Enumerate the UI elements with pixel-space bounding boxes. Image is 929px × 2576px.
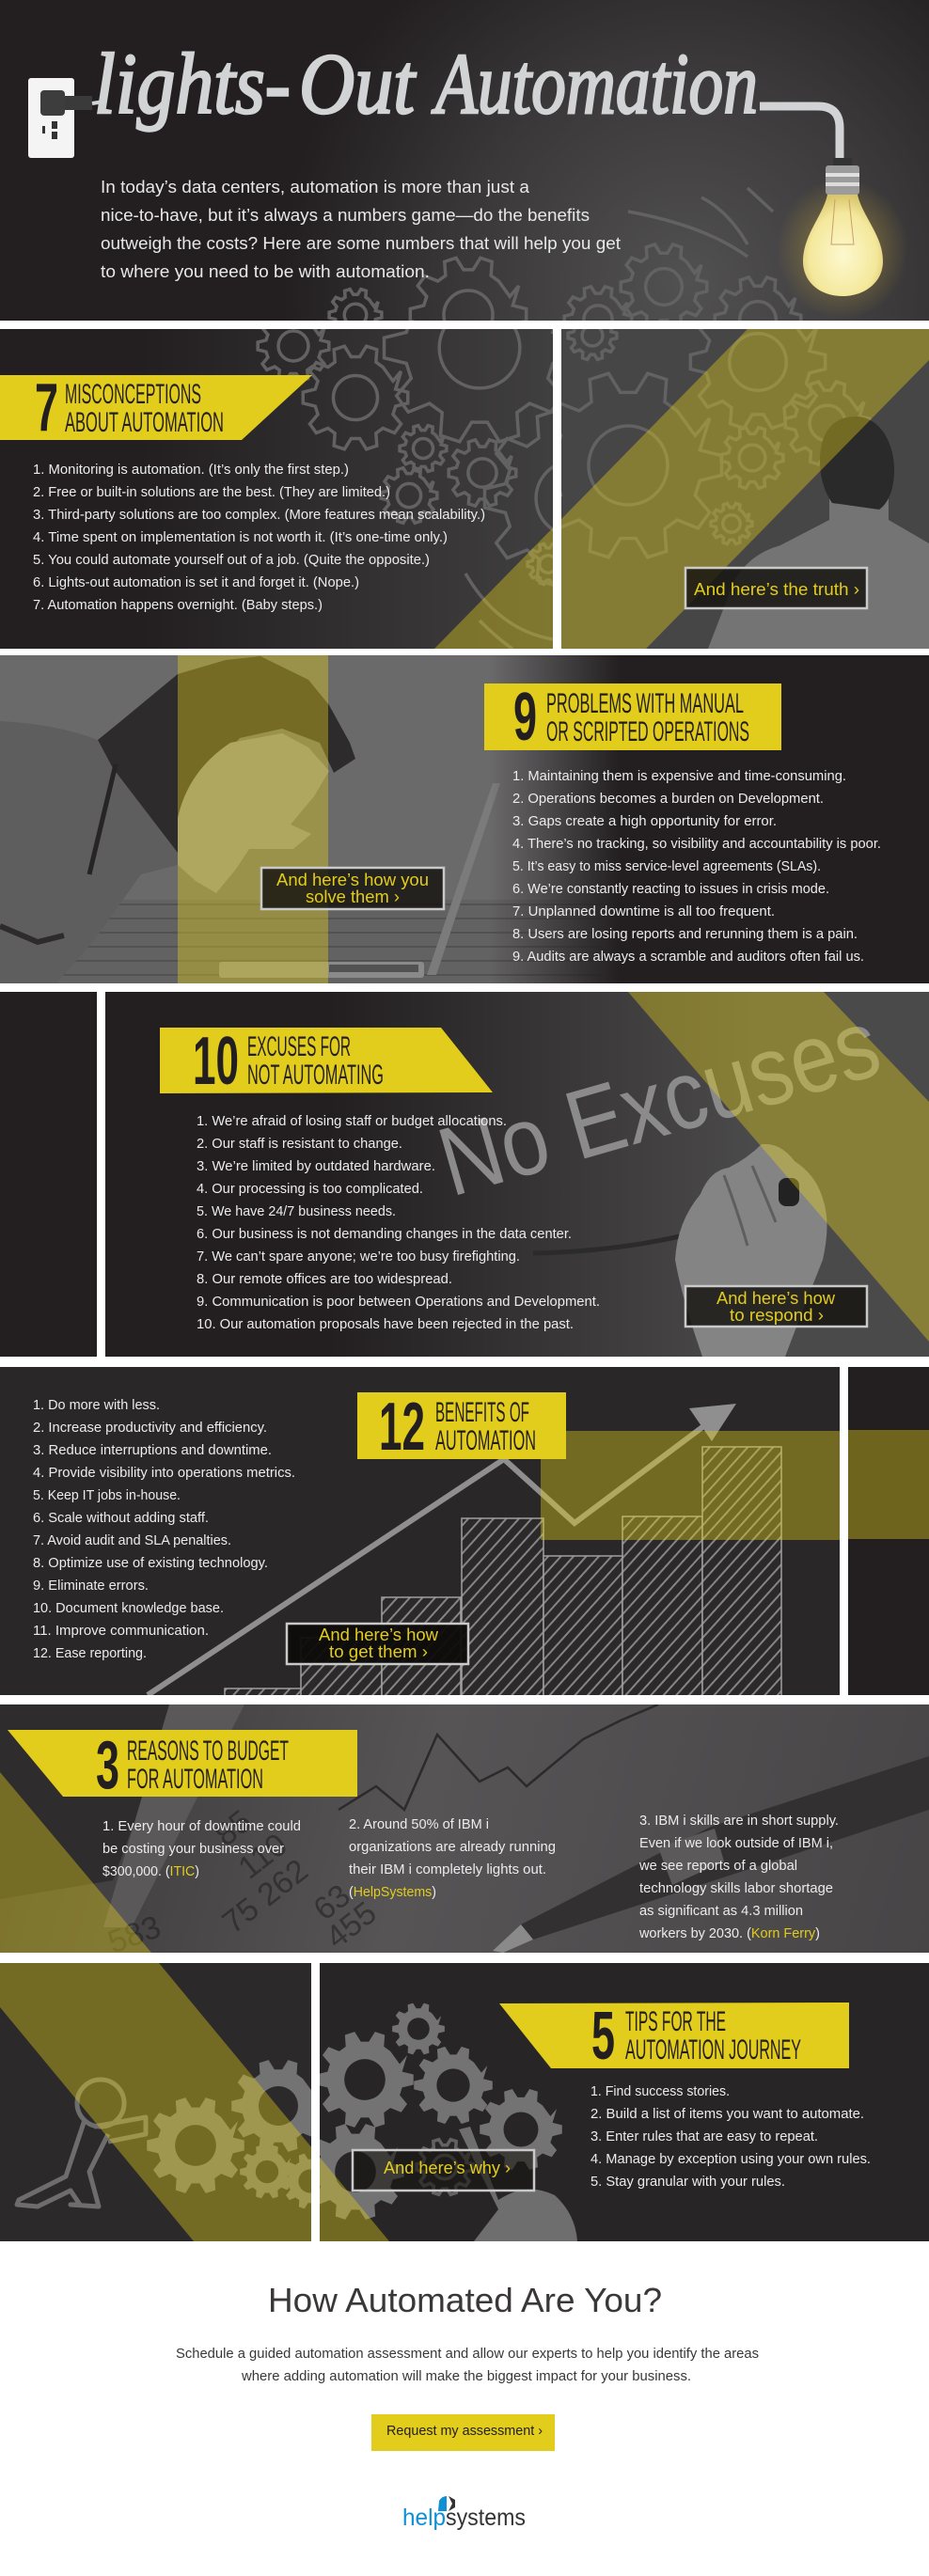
button: how to respond: to respond ›: [730, 1306, 824, 1325]
yellow band: [178, 655, 328, 983]
title: Out: [299, 36, 417, 132]
filled gears: [147, 2060, 339, 2208]
list: [33, 463, 485, 613]
heading banner: OR SCRIPTED OPERATIONS: [546, 716, 749, 747]
panel: 12 benefits side strip: [848, 1367, 929, 1695]
list: 1. Find success stories.: [590, 2084, 730, 2099]
list: 5. Keep IT jobs in-house.: [33, 1488, 181, 1503]
button: and here's the truth: [685, 568, 867, 608]
heading banner: PROBLEMS WITH MANUAL: [546, 688, 744, 719]
title: lights-: [94, 36, 291, 132]
list: 3. Gaps create a high opportunity for error.: [512, 814, 777, 829]
heading banner: BENEFITS OF: [435, 1397, 529, 1428]
heading: how automated are you: How Automated Are You?: [268, 2281, 662, 2319]
intro text: outweigh the costs? Here are some numbers that will help you get: [101, 234, 621, 253]
heading banner: [484, 683, 781, 750]
panel background: [561, 329, 929, 649]
desk photo background: [0, 1704, 929, 1953]
yellow band: [0, 1963, 389, 2241]
panel: 7 misconceptions: [0, 329, 553, 649]
logo: helpsystems: help: [402, 2505, 446, 2531]
panel: 3 reasons: [0, 1704, 929, 1961]
reason 1: $300,000. (ITIC): [102, 1864, 199, 1879]
reason 3: technology skills labor shortage: [639, 1881, 833, 1896]
list: 6. Our business is not demanding changes in the data center.: [197, 1227, 572, 1242]
heading banner: 12: [379, 1390, 425, 1465]
heading banner: 9: [513, 680, 537, 755]
list: 3. Reduce interruptions and downtime.: [33, 1443, 272, 1458]
list: 3. Enter rules that are easy to repeat.: [590, 2129, 818, 2144]
list: 12. Ease reporting.: [33, 1646, 147, 1661]
chalk gears: [256, 329, 553, 649]
list: 11. Improve communication.: [33, 1624, 209, 1639]
title: [97, 51, 756, 133]
heading banner: AUTOMATION: [435, 1425, 536, 1456]
button: how to respond: [685, 1286, 867, 1327]
list: 8. Our remote offices are too widespread.: [197, 1272, 452, 1287]
list: 9. Audits are always a scramble and auditors often fail us.: [512, 950, 864, 965]
yellow band: [0, 1963, 389, 2241]
heading banner: [499, 1999, 849, 2074]
list: 7. Automation happens overnight. (Baby steps.): [33, 598, 323, 613]
reason 1: 1. Every hour of downtime could: [102, 1819, 301, 1834]
chalk gears: [561, 329, 871, 559]
panel background: [320, 1963, 929, 2241]
list: 3. Third-party solutions are too complex. (More features mean scalability.): [33, 508, 485, 523]
reason 2: (HelpSystems): [349, 1885, 436, 1900]
reason 1: be costing your business over: [102, 1842, 284, 1857]
button: and here's the truth: And here’s the truth ›: [694, 580, 859, 599]
heading banner: [8, 1728, 357, 1803]
heading banner: FOR AUTOMATION: [127, 1764, 263, 1795]
icon: power cord: [760, 106, 840, 160]
laptop: [219, 783, 500, 978]
button: how to get them: to get them ›: [329, 1642, 428, 1661]
list: 6. Lights-out automation is set it and forget it. (Nope.): [33, 575, 359, 590]
button: here's why: [353, 2150, 534, 2191]
button: request my assessment: [371, 2414, 555, 2451]
concrete wall background: [0, 655, 613, 900]
button: request my assessment: Request my assessment ›: [386, 2424, 543, 2439]
list: 10. Our automation proposals have been rejected in the past.: [197, 1317, 574, 1332]
button: how you solve them: And here’s how you: [276, 871, 429, 889]
logo: helpsystems: systems: [446, 2505, 526, 2531]
panel: 5 tips: [0, 1963, 929, 2241]
list: 1. Monitoring is automation. (It’s only the first step.): [33, 463, 349, 478]
list: 2. Increase productivity and efficiency.: [33, 1421, 267, 1436]
screaming person: [0, 656, 355, 983]
spreadsheet figures: [103, 1803, 384, 1961]
list: 2. Free or built-in solutions are the best. (They are limited.): [33, 485, 390, 500]
call to action text: where adding automation will make the biggest impact for your business.: [241, 2369, 691, 2384]
list: 5. We have 24/7 business needs.: [197, 1204, 396, 1219]
panel: 10 excuses side strip: [0, 992, 97, 1357]
list: 5. It’s easy to miss service-level agreements (SLAs).: [512, 859, 821, 874]
panel: 10 excuses: [105, 988, 929, 1357]
reason 3: Even if we look outside of IBM i,: [639, 1836, 833, 1851]
list: 7. Unplanned downtime is all too frequent.: [512, 904, 775, 919]
spreadsheet figures: 63: [307, 1877, 357, 1927]
list: 3. We’re limited by outdated hardware.: [197, 1159, 435, 1174]
button: how you solve them: [261, 868, 444, 909]
yellow band: [561, 329, 929, 649]
panel: truth photo: [561, 329, 929, 649]
panel background: [0, 329, 553, 649]
call to action text: [176, 2347, 759, 2384]
reason 1: [102, 1819, 301, 1879]
list: 2. Our staff is resistant to change.: [197, 1137, 402, 1152]
intro text: In today’s data centers, automation is more than just a: [101, 178, 530, 196]
heading banner: ABOUT AUTOMATION: [65, 407, 224, 438]
list: 10. Document knowledge base.: [33, 1601, 224, 1616]
heading banner: 10: [193, 1024, 239, 1099]
list: 6. Scale without adding staff.: [33, 1511, 209, 1526]
fade to dark: [503, 655, 621, 983]
header chalkboard background: [0, 0, 929, 321]
yellow band: [434, 528, 553, 649]
intro text: to where you need to be with automation.: [101, 262, 430, 281]
list: 5. You could automate yourself out of a job. (Quite the opposite.): [33, 553, 430, 568]
list: [33, 1398, 295, 1661]
heading banner: [0, 375, 312, 440]
hand with marker: [533, 1144, 827, 1357]
list: 7. We can’t spare anyone; we’re too busy firefighting.: [197, 1249, 520, 1264]
button: how to respond: And here’s how: [716, 1289, 836, 1308]
list: 7. Avoid audit and SLA penalties.: [33, 1533, 231, 1548]
man seen from behind: [708, 416, 929, 649]
spreadsheet figures: 85: [209, 1803, 259, 1853]
list: 5. Stay granular with your rules.: [590, 2175, 785, 2190]
list: 9. Communication is poor between Operations and Development.: [197, 1295, 600, 1310]
reason 2: [349, 1817, 556, 1900]
list: 8. Users are losing reports and rerunning them is a pain.: [512, 927, 858, 942]
button: how to get them: And here’s how: [319, 1626, 439, 1644]
list: 6. We’re constantly reacting to issues in crisis mode.: [512, 882, 829, 897]
stick figure pushing: [17, 2080, 146, 2207]
heading banner: 3: [96, 1728, 119, 1803]
reason 3: workers by 2030. (Korn Ferry): [638, 1926, 820, 1941]
panel: 12 benefits: [0, 1367, 840, 1707]
button: how to get them: [287, 1624, 468, 1664]
spreadsheet figures: 75 262: [216, 1852, 315, 1940]
panel: pushing gears: [0, 1963, 389, 2241]
list: 8. Optimize use of existing technology.: [33, 1556, 268, 1571]
chalk bar chart: [225, 1447, 781, 1707]
list: 1. We’re afraid of losing staff or budget allocations.: [197, 1114, 507, 1129]
pen: [493, 1756, 929, 1953]
list: 4. Manage by exception using your own rules.: [590, 2152, 871, 2167]
panel background: [0, 1963, 311, 2241]
outline gear: [417, 2140, 473, 2194]
list: 9. Eliminate errors.: [33, 1579, 149, 1594]
intro text: [101, 178, 621, 281]
list: 2. Operations becomes a burden on Development.: [512, 792, 824, 807]
chalk trend arrow: [148, 1404, 736, 1695]
panel: 9 problems: [0, 655, 929, 983]
list: [590, 2084, 871, 2190]
list: 4. Our processing is too complicated.: [197, 1182, 423, 1197]
button: how you solve them: solve them ›: [306, 887, 400, 906]
heading banner: TIPS FOR THE: [625, 2006, 726, 2037]
list: 4. Time spent on implementation is not worth it. (It’s one-time only.): [33, 530, 448, 545]
filled gears: [307, 2003, 562, 2220]
chalk gears: [327, 187, 803, 321]
reason 2: 2. Around 50% of IBM i: [349, 1817, 489, 1832]
heading banner: [357, 1390, 566, 1465]
list: 2. Build a list of items you want to automate.: [590, 2107, 864, 2122]
reason 3: 3. IBM i skills are in short supply.: [639, 1814, 839, 1829]
list: [197, 1114, 600, 1332]
list: 1. Do more with less.: [33, 1398, 160, 1413]
heading banner: MISCONCEPTIONS: [65, 379, 201, 410]
reason 3: we see reports of a global: [638, 1859, 797, 1874]
hand pointing: [459, 2127, 577, 2241]
reason 2: organizations are already running: [349, 1840, 556, 1855]
yellow band: [541, 1431, 840, 1540]
intro text: nice-to-have, but it’s always a numbers game—do the benefits: [101, 206, 590, 225]
title: Automation: [431, 36, 758, 132]
yellow band: [0, 1772, 151, 1953]
list: 4. Provide visibility into operations metrics.: [33, 1466, 295, 1481]
spreadsheet figures: 583: [103, 1908, 165, 1961]
logo: helpsystems: [402, 2496, 526, 2531]
heading banner: EXCUSES FOR: [247, 1031, 351, 1062]
button: here's why: And here’s why ›: [384, 2159, 511, 2177]
list: [512, 769, 881, 965]
reason 3: [638, 1814, 839, 1941]
heading banner: [160, 1028, 493, 1093]
panel: header: [0, 0, 929, 321]
heading banner: 5: [591, 1999, 615, 2074]
heading banner: REASONS TO BUDGET: [127, 1736, 289, 1767]
icon: light bulb: [784, 158, 902, 312]
panel background: [0, 1367, 840, 1695]
spreadsheet figures: 455: [320, 1894, 384, 1956]
call to action text: Schedule a guided automation assessment and allow our experts to help you identify the areas: [176, 2347, 759, 2362]
list: 1. Maintaining them is expensive and time-consuming.: [512, 769, 846, 784]
list: 4. There’s no tracking, so visibility and accountability is poor.: [512, 837, 881, 852]
right dark area: [621, 655, 929, 983]
icon: outlet and plug: [28, 78, 103, 158]
heading banner: 7: [35, 370, 58, 446]
heading banner: NOT AUTOMATING: [247, 1060, 384, 1091]
spreadsheet figures: 110: [232, 1827, 294, 1886]
panel background: [105, 992, 929, 1357]
table: [63, 903, 584, 976]
reason 3: as significant as 4.3 million: [639, 1904, 803, 1919]
reason 2: their IBM i completely lights out.: [349, 1862, 546, 1877]
yellow band: [628, 992, 929, 1342]
